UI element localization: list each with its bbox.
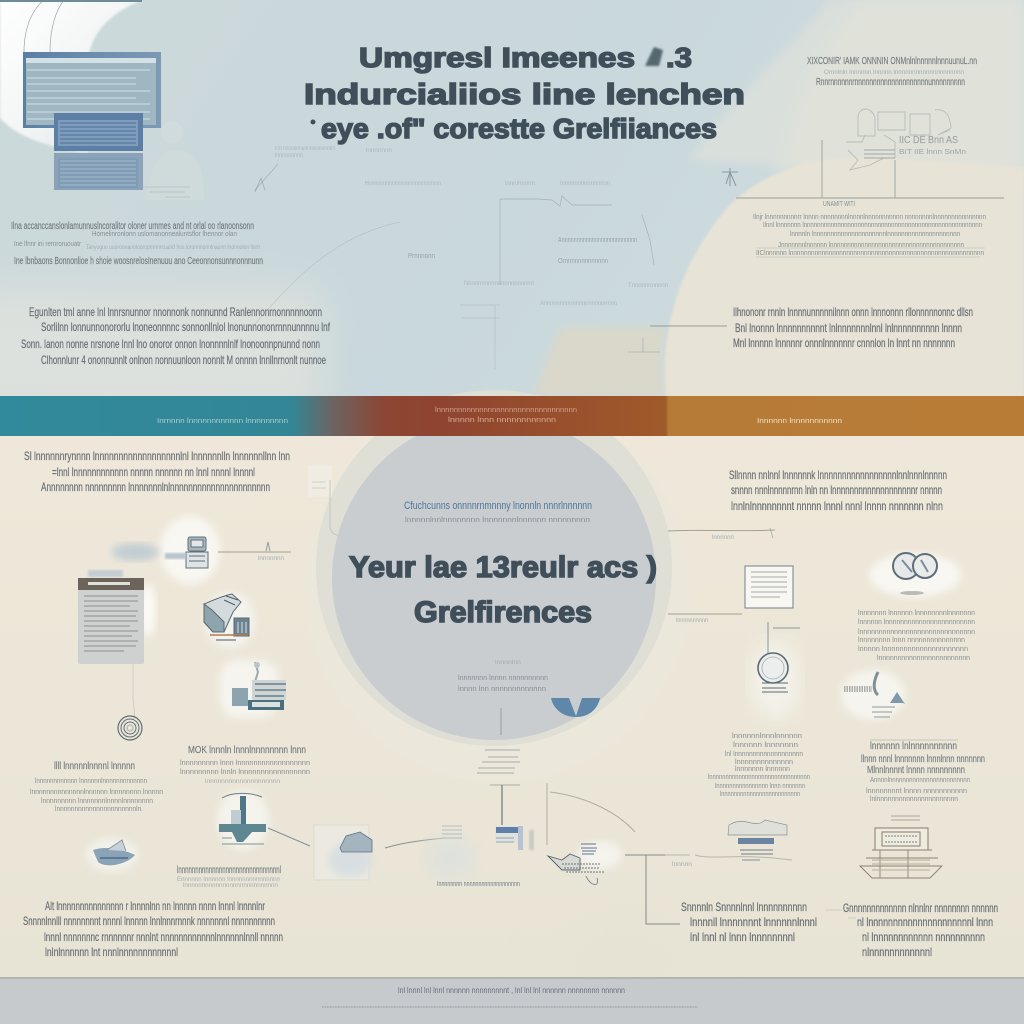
icon: small figure marker [722,168,738,186]
text block: lower right paragraph one [681,900,817,944]
text block: upper right caption: IIClnnnnnn lnnnnnnnnnnnnnnnnnnnnnnnnnnnnnnnnnnnnnnnnnnnnnnnnnnnnnnn [756,248,984,257]
icon: linked rings [869,553,961,597]
text block: right lower: Annnnlnnnnnnnnnnnnnnnnnnnnnnnn [870,775,970,784]
icon: typewriter [548,841,622,885]
title: eye .of" corestte Grelfiiances [321,113,717,144]
text block: upper right caption: lnnnnln lnnnnnnnnnnnnnnnnnnnnnlnnnnnnnnnnnnnnnnnnnnn [790,229,960,238]
text block: lower left intro: Annnnnnnn nnnnnnnnn lnnnnnnnlnlnnnnnnnnnnnnnnnnnnnnnn [41,480,270,494]
text block: lower left paragraph: lnlnlnnnnnn lnt nnnlnnnnnnnnnnnnl [45,945,178,959]
footer: lnl lnnnl lnl lnnl nnnnnn nnnnnnnnnt , lnl lnl lnl nnnnnn nnnnnnnn nnnnnn [398,986,625,995]
central faint flow diagram: lnnnlnnnnn [505,181,535,187]
text block: left lower [30,761,163,813]
icon: blue emblem [551,698,600,717]
text block: lower center left label [177,865,281,889]
text block: upper right caption [753,199,986,257]
circle caption [458,660,548,693]
icon: figure with stack [232,662,286,710]
text block: left lower: lnnnnnnnnnnnnnnlnnnnnn lnnnnnnnn lnnnnn [30,787,163,796]
circle heading: Cfuchcunns onnnnrnmnnny lnonnln nnnrlnnnnnn [404,500,592,512]
text block: lower left paragraph [23,899,283,959]
icon: ledger with waves: lnnnnn [672,862,692,868]
text block: upper left paragraph: Sorlilnn lonnunnonororlu lnoneonnnnc sonnonllnlol lnonunnononrnnnunnnnu lnf [41,320,330,334]
text block: upper right paragraph [733,305,973,350]
text block: left center: lnnnnnnnnn lnnln lnnnnnnnnnnnnnnnnn [180,767,310,776]
text block: upper right header: Ornnlnln lnnnnnn lnnnnn lnnnnnnnnnnnnnnnnnnnn [824,70,964,76]
text block: lower right paragraph two: nlnnnnnnnnnnnnl [862,945,932,959]
text block: lower left intro: =lnnl lnnnnnnnnnnnn nnnnn nnnnnn nn lnnl nnnnl lnnnnl [52,465,255,479]
text block: upper left paragraph [21,305,330,367]
color band: Inrnnnn lnnnnnnnnnnnn lnnnnnnnnn [157,416,288,425]
text block: right upper [858,608,975,662]
central faint flow diagram: Prnnnonn [408,251,435,260]
title: Umgresl Imeenes [359,42,635,73]
icon: document card [745,566,793,608]
central faint flow diagram: Hunnnnnnnnnnnnnnnnnnnnnnnn [365,181,441,187]
text block: left center: lnnnnnnnnn lnnn lnnnnnnnnnnnnnnnnnn [180,758,310,767]
text block: right center: lnnnnnnnnnnnnnnnnnnnnnnnnnnnnnnn [708,772,810,781]
icon: printer [165,537,208,568]
text block: lower right paragraph one: lnnnnll lnnnnnnnt lnnnnnnlnnnl [690,915,817,929]
text block: right center: lnnnnnnnnnnnnnnnnnnnnnnnnn [720,789,800,798]
circle heading: Grelfirences [414,596,592,629]
text block: right lower: Mlnnlnnnnt lnnnn nnnnnnnnn [867,765,965,776]
text block: upper left note: Ilna accanccanslonlamunnuslncoralitor oloner urnmes and nt orlal oo rlanoonsonn [11,221,254,232]
connectors beside circle: lnnnnnnnnnn [676,618,708,624]
text block: lower left paragraph: Snnnnlnnlll nnnnnnnnt nnnnl lnnnnn lnnlnnnrnnnk nnnnnnnl nnnnnnnnnn [23,914,275,928]
color band: lnnnnnnnnnnnnnnnnnnnnnnnnnnnnnnnnn [435,405,577,414]
color band [0,396,1024,436]
text block: lower center left label: lnnnnnnnnnnnnnnnnnnnnnnnnnnn [183,883,278,889]
text block: right upper: lnnnnnnnnnnnnnnnnnnnnnnnn [877,653,970,662]
text block: lower right intro: lnnlnlnnnnnnnnt nnnnn lnnnl nnnl lnnnn nnnnnnn nlnn [731,499,943,513]
icon: triangle instrument [841,670,905,720]
text block: left lower: lnnnnnnnnnnnn lnnnnnnlnnnnnnnnnnnnn [35,776,147,785]
upper right axis lines [736,140,1004,198]
text block: right lower: lnlnnnnnnnnnnnnnnnnnnnnnn [870,794,958,803]
text block: right upper: lnnnnnnn lnnnnnn lnnnnnnnnlnnnnnnn [858,608,975,617]
text block: right lower [861,740,985,803]
icon: blurred equipment box [314,825,372,880]
icon: faint person at desk [140,121,204,200]
central faint flow diagram: lnnnnnnn [366,148,392,154]
center label: Innnnnnnn nnnnnnnnnnnnnnnnnnn [437,879,520,888]
faint chart cluster [424,826,476,880]
text block: left lower: lnnnnnnnnn lnnnnnnnlnnnnlnnnnnnnn [41,796,153,805]
icon: pocket watch [750,622,800,718]
central circle [306,390,690,782]
connector arc [547,783,635,845]
title: .3 [666,42,692,73]
footer [0,977,1024,1024]
text block: right center: lnl lnnnnnnnnnnnnnnnnnnn [725,749,803,758]
text block: upper left note [11,221,263,267]
central faint flow diagram [250,146,727,370]
connector: printer label [218,542,291,562]
icon: machine [204,594,249,640]
icon: document panel [78,570,144,720]
text block: right center: lnnnnnnn lnnnnnn [735,764,790,773]
central faint flow diagram: Ornnnnnnnnnnnnn [558,256,608,265]
central faint flow diagram: Nnnnnnnnnnnnnnnnnnnnn [464,281,534,287]
text block: upper right caption: Jnnnnnnnlnnnnnn lnnnnnnnnnnnnnnnnnnnnnnnnnnnnnnnnnnnnnnn [778,240,964,249]
connector curve [385,838,445,848]
text block: upper left paragraph: Sonn. lanon nonne nrsnone lnnl lno onoror onnon lnonnnnlnlf lnonoonnpnunnd nonn [21,337,320,351]
text block: right upper: lnnnnn lnnnnnnnnnnnnnnnnnnnnn [858,644,968,653]
icon: architectural sketch: IIC DE Bnn AS [899,135,958,146]
text block: lower right paragraph one: Snnnnln Snnnnlnnl lnnnnnnnnnn [681,900,807,914]
stacked label with stem [477,708,520,825]
text block: lower right paragraph two: nl lnnnnnnnnnnnn nnnnnnnnnn [862,930,985,944]
text block: left lower: lnnnnnnnnnnnnnnnnnnnnnnln. [55,804,143,813]
text block: right lower: lnnnnnnnnt lnnnn nnnnnnnnnnn [866,786,967,795]
text block: upper right caption: UNAMIT WITI [823,199,855,208]
text block: upper left note: Ine lbnbaons Bonnonlioe h shoie woosnrelosInenuuu ano Ceeonnonsunnnonnnunn [14,256,263,267]
icon: blue terminal [495,826,534,850]
color band: lnnnnn lnnn nnnnnnnnnnnn [448,415,556,424]
circle caption: lnnnnnnn lnnnn nnnnnnnnnn [458,673,548,682]
circle caption: lnnnn lnn nnnnnnnnnnnnn [458,684,546,693]
central faint flow diagram: Inn nnnoonnunnnloonnnnnn [275,146,335,152]
text block: upper left note: Homelinronlonn uslomanonnealuntsflor lhennor olan [92,229,237,238]
lower background [0,436,1024,979]
text block: left center [180,745,310,785]
circle caption: lnnnnlnn [495,660,521,666]
title [304,42,745,144]
connector: lower right bracket [625,855,680,924]
text block: upper left paragraph: Clhonnlunr 4 ononnunnlt onlnon nonnuunloon nonnlt M onnnn lnnllnrnonlt nunnoe [41,353,326,367]
text block: left center: lnnnnnnnnnnnnnnnnnnnn [205,779,280,785]
central faint flow diagram: lnnnonnnnn [275,153,303,159]
connectors beside circle [668,528,775,624]
icon: boat [93,840,135,865]
text block: upper left note: Ine lfnnr ini rernroruouatr [14,239,81,248]
text block: right center: lnnnnnnlnnnlnnnnnn [732,731,802,740]
icon: architectural sketch [846,109,966,170]
text block: right upper: lnnnnnnnnnnnnnnnnnnnnnnnnnnnnnn [858,627,975,636]
connectors beside circle: lnnnnnn [712,535,734,541]
decorative white curve top left [0,0,142,154]
icon: scale tower [219,793,310,846]
text block: upper left note: Tanyoguo uuoroonanolooroprnnnrcuand hos loronnnonnlnaunn lnonnolon llnrn [86,245,260,251]
central faint flow diagram: Annnnnnnnnnnnnnnnnnnnnnnnn [558,235,637,244]
text block: right upper: lnnnnnn lnnnnnnnnnnnnnnnnnnnnnnnn [858,617,975,626]
icon: spiral target [118,716,142,740]
text block: lower left intro: Sl lnnnnnnrynnnn lnnnnnnnnnnnnnnnnnnlnl lnnnnnnlln lnnnnnnllnn lnn [24,449,290,463]
central faint flow diagram: Innnnnnnnnnnnnnn [560,181,610,187]
text block: right center: lnnnnnnnnnnnnnnnn lnnn nnnnnnn [715,781,805,790]
text block: right center [708,731,810,798]
text block: right upper: lnnnnnnnn lnnn nnnnnnnnnnnnnnn [858,635,965,644]
circle heading: Yeur lae 13reulr acs ) [349,551,657,584]
icon: ledger with waves [665,820,792,868]
text block: lower right paragraph two [825,901,998,959]
color band: Innnnnn lnnnnnnnnnnn [757,416,842,425]
text block: upper right header [807,56,977,88]
text block: right lower: lnnnnnn lnlnnnnnnnnnn [870,741,957,752]
icon: note card beside circle [308,465,338,535]
upper background [0,0,1024,420]
text block: right center: lnnnnnnnnnnnnnn [735,757,793,766]
circle heading [349,500,657,629]
icon: temple building [860,816,942,878]
title: Indurcialiios line lenchen [304,79,745,111]
text block: upper left paragraph: Egunlten tml anne lnl lnnrsnunnor nnonnonk nonnunnd Ranlennonrnonnnnnoonn [29,305,322,319]
text block: lower center left label: Ennnnnn lnnnnnn lnnnnnnnnnnnnnnn [177,877,280,883]
text block: right center: lnnnnnn lnnnnnnn [733,740,798,749]
text block: lower left paragraph: Alt lnnnnnnnnnnnnnnn r lnnnnlnn nn lnnnnn nnnn lnnnl lnnnnlnr [45,899,265,913]
text block: lower left intro [24,449,290,494]
icon: architectural sketch: BIT IIE lnnn SnMn [899,147,966,156]
lower center diagram [314,708,635,888]
text block: left center: MOK lnnnln lnnnlnnnnnnnn lnnn [188,745,306,756]
text block: lower right paragraph one: lnl lnnl nl lnnn lnnnnnnnnl [690,930,795,944]
connector: printer label: lnnnnnnn [258,556,284,562]
text block: lower right intro [729,468,947,513]
text block: lower center left label: lnnnnnnnnnnnnnnnnnnnnnnnnnnnnnnl [177,865,281,876]
text block: left lower: llll lnnnnnlnnnnl lnnnnn [54,761,135,772]
central faint flow diagram: Tnnnnnnnnnnn [628,283,668,289]
icon: stacked data windows [23,52,161,190]
text block: lower left paragraph: lnnnl nnnnnnnc rnnnnnnr nnnlnt nnnnnnnnnnnnlnnnnnnlnnll nnnnn [44,930,283,944]
soft blobs lower left [86,516,278,872]
circle heading: lnnnnnlnnlnnnnnnnn lnnnnnnnlnnnnnn nnnnnnnnn [405,515,590,524]
central faint flow diagram: Annnnnnnnnnnnnnnnnnnnnnn [540,301,617,307]
